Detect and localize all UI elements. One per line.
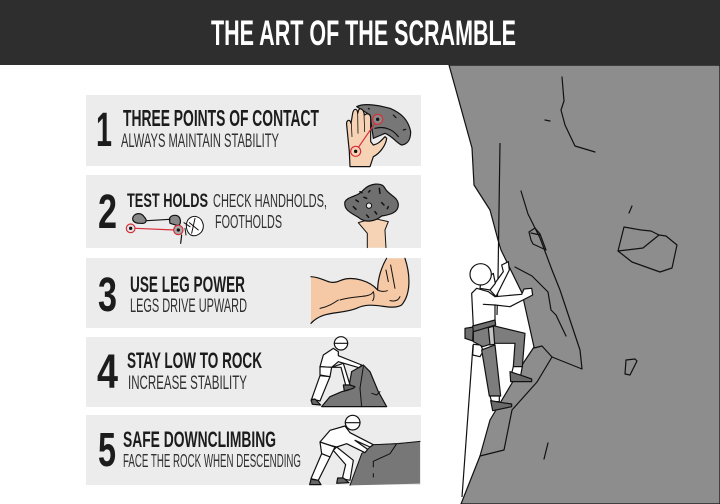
number 5: 5 [98,424,116,477]
text: face the rock when descending: FACE THE ROCK WHEN DESCENDING [123,451,301,471]
climber on rock wall [465,262,533,411]
heading: safe downclimbing: SAFE DOWNCLIMBING [123,427,276,452]
icon: hand gripping rock hold [345,184,398,248]
heading: test holds: TEST HOLDS [127,191,208,212]
panel: step 1 [86,95,421,167]
number 3: 3 [98,269,117,322]
icon: flexed muscle [311,258,409,323]
rope [462,143,500,497]
text: always maintain stability: ALWAYS MAINTAIN STABILITY [121,131,279,152]
heading: use leg power: USE LEG POWER [130,272,245,297]
number 1: 1 [96,104,112,157]
icon: climber staying low on rock [311,337,387,407]
text: check handholds: CHECK HANDHOLDS, [213,191,327,211]
panel: step 4 [86,337,421,407]
icon: connected holds diagram [126,214,203,243]
heading: stay low to rock: STAY LOW TO ROCK [127,348,262,373]
panel: step 5 [86,415,421,485]
icon: climber descending rock [310,415,420,485]
number 4: 4 [97,346,118,399]
panel: step 3 [86,258,421,328]
title: THE ART OF THE SCRAMBLE [211,14,516,53]
number 2: 2 [98,186,117,239]
text: footholds: FOOTHOLDS [215,212,282,232]
icon: hand on rock hold [347,105,411,167]
panel: rock wall illustration [449,65,720,504]
text: increase stability: INCREASE STABILITY [128,373,247,394]
heading: three points of contact: THREE POINTS OF CONTACT [123,105,319,131]
panel: step 2 [86,175,421,248]
title banner [0,0,720,65]
text: legs drive upward: LEGS DRIVE UPWARD [130,296,247,317]
